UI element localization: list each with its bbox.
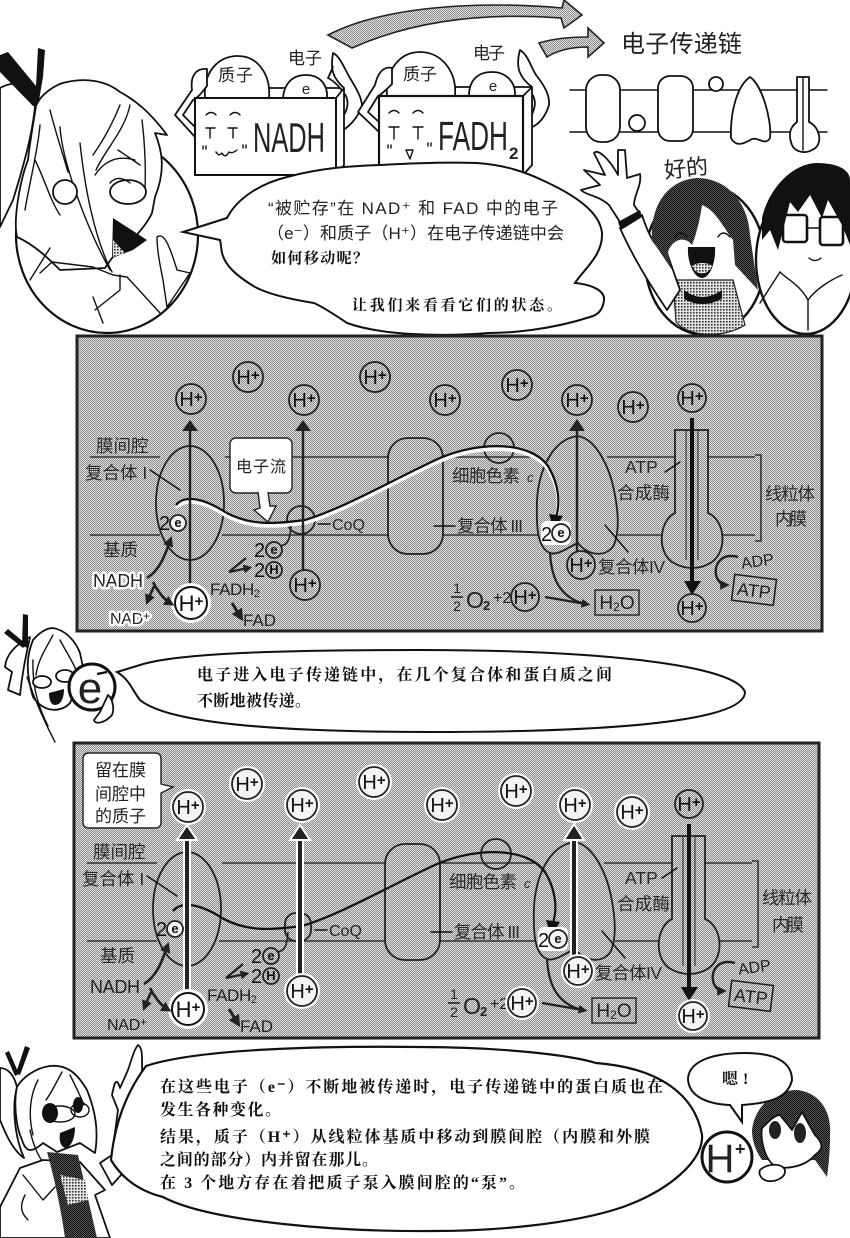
ATP synthase	[662, 430, 723, 568]
callout: protons remaining in intermembrane space: 的质子	[95, 807, 146, 826]
protons: +	[696, 1006, 705, 1023]
labels: ATP	[625, 868, 658, 888]
panel 2: protons remaining in intermembrane space	[74, 743, 819, 1038]
protons: +	[305, 795, 314, 812]
membrane lines	[87, 863, 752, 941]
right characters: students waving, "好的"	[581, 150, 850, 335]
ATP synthase	[659, 836, 720, 974]
water formation: H	[510, 993, 525, 1015]
protons: H	[293, 575, 308, 597]
FADH2 reaction: FAD	[243, 611, 276, 630]
protons: H	[176, 997, 192, 1022]
protons: +	[445, 795, 454, 812]
cytochrome c circle	[481, 839, 511, 869]
water formation: 2	[613, 600, 620, 614]
2e- in complex I	[159, 513, 186, 535]
FADH2 reaction: FAD	[240, 1017, 273, 1036]
proton arrows	[182, 418, 701, 595]
heading: electron transport chain: 电子传递链	[621, 31, 742, 58]
protons: +	[448, 390, 457, 407]
callout: electron flow	[230, 438, 292, 522]
protons: H	[290, 795, 305, 817]
water formation: +	[525, 993, 534, 1010]
FADH2 proton and electron bubbles with arms: 质子	[403, 65, 437, 84]
labels: 复合体 I	[85, 463, 147, 483]
FADH2 reaction: H	[269, 562, 279, 577]
2e- in complex I: e	[174, 515, 182, 530]
2e- in complex IV: e	[557, 525, 565, 540]
labels: c	[527, 470, 534, 485]
bottom right proton character: H	[706, 1137, 734, 1181]
water formation: O	[620, 593, 635, 614]
labels: CoQ	[329, 923, 362, 940]
proton arrows with white halo	[177, 824, 698, 1001]
large speech bubble: proton pumps explanation: 在 3 个地方存在着把质子泵入膜间腔的“泵”。	[160, 1173, 525, 1192]
FADH2 reaction: FADH	[207, 986, 251, 1005]
NADH reaction: NADH	[90, 977, 140, 997]
protons: +	[377, 772, 386, 789]
speech bubble: how do they move	[183, 163, 604, 335]
large speech bubble: proton pumps explanation: 结果，质子（H⁺）从线粒体基质中移动到膜间腔（内膜和外膜	[160, 1127, 650, 1147]
protons: +	[194, 389, 203, 406]
protons: +	[692, 794, 701, 811]
protons: H	[290, 981, 305, 1003]
complex I	[153, 852, 221, 966]
NADH proton and electron bubbles with arms	[175, 49, 362, 137]
protons: H	[430, 795, 445, 817]
FADH2 reaction: 2	[254, 588, 260, 600]
NADH reaction	[93, 541, 170, 628]
water formation: O	[466, 587, 484, 613]
large speech bubble: proton pumps explanation: 发生各种变化。	[160, 1100, 281, 1119]
protons: H	[363, 367, 378, 389]
protons: H	[176, 797, 191, 819]
bracket for inner membrane	[755, 455, 761, 541]
NADH box	[195, 88, 344, 175]
FADH2 proton and electron bubbles with arms: 电子	[473, 44, 505, 63]
ADP to ATP	[716, 551, 776, 605]
labels: 线粒体	[762, 888, 812, 908]
water formation: 2	[453, 598, 461, 614]
labels: 基质	[103, 540, 138, 560]
FADH2 proton and electron bubbles with arms	[358, 44, 549, 132]
complex III	[385, 844, 440, 960]
protons: +	[192, 999, 201, 1016]
protons: H	[505, 375, 520, 397]
FADH2 proton and electron bubbles with arms: e	[489, 78, 497, 95]
protons: +	[636, 397, 645, 414]
2e- in complex I: 2	[156, 919, 167, 941]
NADH proton and electron bubbles with arms: 电子	[288, 49, 322, 68]
FADH2 reaction: e	[270, 542, 278, 557]
callout: protons remaining in intermembrane space	[83, 753, 173, 828]
labels: 复合体 III	[454, 922, 520, 942]
protons: H	[179, 591, 195, 616]
labels: 内膜	[775, 509, 807, 529]
2e- in complex IV	[538, 927, 568, 952]
right characters: students waving, "好的": 好的	[663, 154, 709, 183]
FADH2 reaction: 2	[251, 946, 262, 968]
protons: H	[677, 794, 692, 816]
2e- in complex IV: 2	[538, 930, 549, 952]
protons: +	[305, 981, 314, 998]
complex III	[388, 438, 443, 554]
small grey arrow to electron transport chain	[539, 28, 604, 57]
water formation: 2	[610, 1008, 617, 1022]
protons: +	[695, 388, 704, 405]
callout: protons remaining in intermembrane space: 间腔中	[95, 785, 146, 804]
FADH2 reaction: 2	[251, 994, 257, 1006]
FADH2 reaction: 2	[254, 560, 265, 582]
protons: H	[681, 1006, 696, 1028]
water formation: O	[463, 993, 481, 1019]
protons: H	[565, 390, 580, 412]
callout: electron flow: 电子流	[236, 458, 286, 476]
protons: H	[620, 802, 635, 824]
coenzyme Q circle	[285, 913, 311, 941]
protons	[168, 764, 710, 1033]
labels: 内膜	[772, 915, 804, 935]
bottom right proton character: +	[735, 1139, 746, 1159]
protons: +	[191, 797, 200, 814]
protons: +	[635, 802, 644, 819]
2e- in complex I	[156, 919, 183, 941]
labels: ATP	[625, 457, 658, 477]
complex IV	[534, 842, 615, 960]
water formation: +	[528, 587, 537, 604]
2e- in complex IV	[541, 521, 571, 546]
labels: 膜间腔	[96, 436, 148, 456]
water formation: H	[599, 593, 613, 614]
complex IV	[537, 436, 618, 554]
ADP to ATP: ADP	[737, 957, 772, 979]
labels: 复合体 III	[457, 516, 523, 536]
protons: H	[292, 390, 307, 412]
ADP to ATP: ADP	[740, 551, 775, 573]
speech bubble: "嗯!"	[688, 1053, 792, 1122]
labels: 线粒体	[765, 484, 816, 504]
protons: +	[250, 774, 259, 791]
protons: +	[581, 961, 590, 978]
protons	[171, 362, 706, 623]
water formation	[448, 958, 636, 1023]
protons: +	[378, 367, 387, 384]
NADH reaction: +	[140, 1015, 147, 1029]
speech bubble: how do they move: （e⁻）和质子（H⁺）在电子传递链中会	[267, 224, 564, 243]
speech bubble: "嗯!": 嗯 !	[722, 1070, 748, 1088]
protons: H	[433, 390, 448, 412]
FADH2 reaction: FADH	[210, 580, 254, 599]
water formation	[451, 552, 639, 615]
protons: +	[308, 575, 317, 592]
protons: H	[680, 388, 695, 410]
water formation: 2	[483, 598, 490, 613]
speech bubble: electrons enter chain	[117, 650, 745, 732]
mini membrane diagram	[570, 75, 827, 152]
bottom left character pointing up	[0, 1045, 150, 1238]
labels: CoQ	[332, 517, 365, 534]
cytochrome c circle	[484, 433, 514, 463]
top curved grey arrow	[328, 0, 582, 48]
water formation: +2	[490, 996, 508, 1013]
NADH reaction: +	[143, 609, 150, 623]
speech bubble: electrons enter chain: 不断地被传递。	[197, 691, 311, 710]
water formation: O	[617, 1001, 632, 1022]
FADH2 reaction: 2	[254, 540, 265, 562]
water formation: 2	[450, 1004, 458, 1020]
left character: teacher in oval	[0, 48, 198, 333]
speech bubble: how do they move: 如何移动呢？	[271, 249, 368, 267]
ADP to ATP	[713, 957, 773, 1011]
FADH2 reaction	[207, 932, 288, 1036]
large speech bubble: proton pumps explanation: 在这些电子（e⁻）不断地被传递时，电子传递链中的蛋白质也在	[160, 1077, 663, 1097]
small teacher with electron badge	[4, 614, 115, 742]
protons: H	[680, 598, 695, 620]
callout: protons remaining in intermembrane space: 留在膜	[95, 761, 146, 780]
water formation: +2	[493, 590, 511, 607]
protons: H	[235, 774, 250, 796]
labels: 基质	[100, 946, 135, 966]
labels	[85, 436, 816, 577]
NADH box: NADH	[253, 114, 325, 161]
FADH2 reaction	[210, 526, 291, 630]
protons: H	[621, 397, 636, 419]
FADH2 reaction: 2	[251, 966, 262, 988]
protons: +	[195, 593, 204, 610]
FADH2 box: FADH	[438, 113, 508, 159]
bottom right proton character	[702, 1090, 830, 1182]
labels: 细胞色素	[452, 466, 520, 486]
NADH reaction	[90, 947, 167, 1034]
protons: +	[519, 781, 528, 798]
complex I	[156, 446, 224, 560]
coenzyme Q circle	[287, 506, 315, 534]
2e- in complex IV: 2	[541, 524, 552, 546]
panel 1: electron flow diagram	[77, 336, 822, 631]
FADH2 reaction: H	[266, 968, 276, 983]
ADP to ATP: ATP	[736, 579, 772, 603]
NADH reaction: NAD	[107, 1017, 140, 1034]
speech bubble: electrons enter chain: 电子进入电子传递链中，在几个复合体和蛋白质之间	[197, 665, 612, 685]
protons: +	[520, 375, 529, 392]
labels: 合成酶	[617, 894, 670, 914]
membrane lines	[90, 457, 755, 535]
protons: +	[695, 598, 704, 615]
water formation: 1	[450, 986, 458, 1002]
protons: H	[566, 961, 581, 983]
water formation: 1	[453, 580, 461, 596]
NADH proton and electron bubbles with arms: e	[302, 81, 310, 98]
large speech bubble: proton pumps explanation: 之间的部分）内并留在那儿。	[160, 1150, 378, 1169]
labels: c	[524, 876, 531, 891]
large speech bubble: proton pumps explanation	[111, 1047, 702, 1231]
protons: +	[578, 795, 587, 812]
labels: 复合体IV	[598, 557, 665, 577]
electron flow curve	[173, 852, 560, 936]
labels: 复合体IV	[595, 963, 662, 983]
labels: 细胞色素	[449, 872, 517, 892]
2e- in complex IV: e	[554, 931, 562, 946]
FADH2 reaction: e	[267, 948, 275, 963]
NADH reaction: NAD	[110, 611, 143, 628]
electron flow curve	[176, 446, 563, 530]
protons: H	[569, 555, 584, 577]
water formation: H	[513, 587, 528, 609]
protons: +	[251, 367, 260, 384]
protons: H	[362, 772, 377, 794]
speech bubble: how do they move: 让我们来看看它们的状态。	[352, 296, 562, 314]
water formation: H	[596, 1001, 610, 1022]
protons: H	[504, 781, 519, 803]
protons: H	[236, 367, 251, 389]
2e- in complex I: 2	[159, 513, 170, 535]
protons: H	[563, 795, 578, 817]
FADH2 box	[379, 87, 532, 175]
speech bubble: how do they move: “被贮存”在 NAD⁺ 和 FAD 中的电子	[268, 199, 558, 218]
protons: +	[580, 390, 589, 407]
labels: 合成酶	[617, 483, 670, 503]
labels	[82, 842, 812, 983]
ADP to ATP: ATP	[733, 985, 769, 1009]
bracket for inner membrane	[752, 861, 758, 947]
NADH reaction: NADH	[93, 571, 143, 591]
small teacher with electron badge: e	[78, 664, 102, 713]
water formation: 2	[480, 1004, 487, 1019]
labels: 膜间腔	[93, 842, 146, 862]
protons: +	[584, 555, 593, 572]
FADH2 box: 2	[509, 144, 518, 163]
2e- in complex I: e	[171, 921, 179, 936]
labels: 复合体 I	[82, 869, 144, 889]
protons: H	[179, 389, 194, 411]
NADH proton and electron bubbles with arms: 质子	[218, 66, 253, 85]
protons: +	[307, 390, 316, 407]
